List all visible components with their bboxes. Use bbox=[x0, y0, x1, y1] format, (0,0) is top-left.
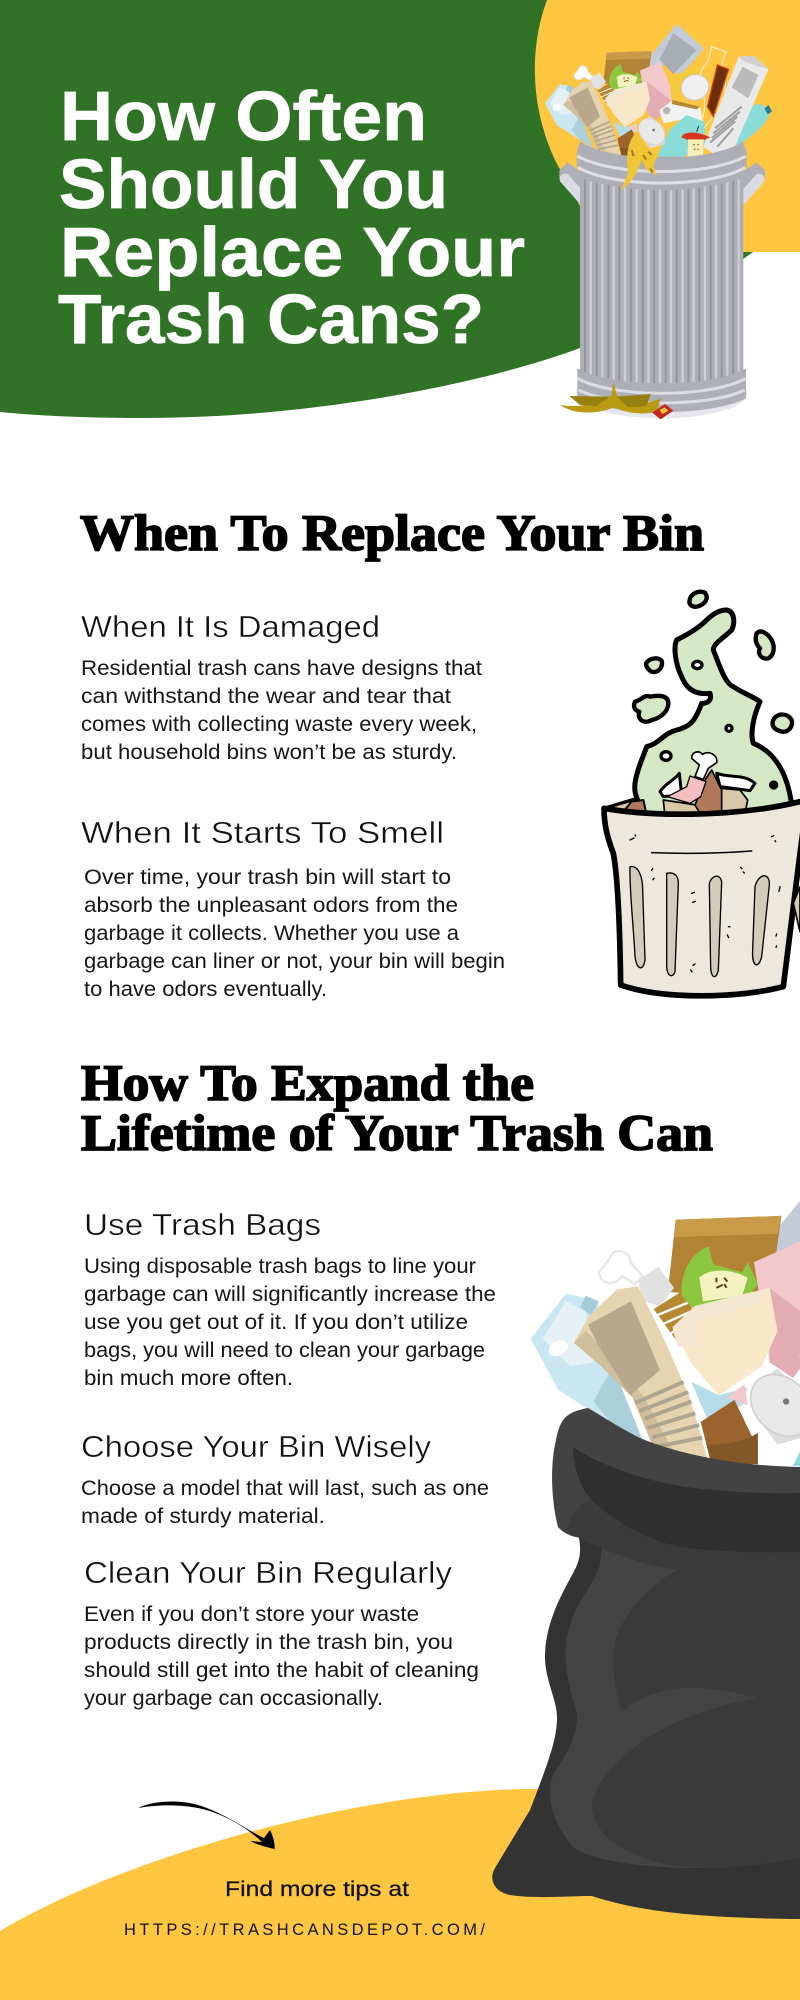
left handle bbox=[559, 162, 596, 217]
pink carton bbox=[640, 62, 672, 120]
bag neck lower band bbox=[566, 1500, 800, 1570]
section: when it starts to smell: garbage can liner or not, your bin will begin bbox=[84, 950, 505, 973]
can body bbox=[580, 157, 743, 391]
wrapper bbox=[652, 404, 673, 419]
bag silhouette bbox=[492, 1538, 800, 1919]
header green background bbox=[0, 0, 762, 418]
fluting dark bbox=[585, 180, 733, 385]
section: clean your bin regularly: should still get into the habit of cleaning bbox=[84, 1659, 479, 1682]
banana peel at base bbox=[560, 382, 661, 413]
title: Trash Cans? bbox=[58, 280, 484, 358]
section: clean your bin regularly: your garbage can occasionally. bbox=[84, 1687, 383, 1710]
section: use trash bags: bin much more often. bbox=[84, 1367, 293, 1390]
fluting light bbox=[591, 179, 739, 385]
section: clean your bin regularly: Even if you don’t store your waste bbox=[84, 1603, 419, 1626]
section: when it starts to smell bbox=[81, 815, 505, 1001]
section: when it is damaged: can withstand the wear and tear that bbox=[81, 685, 451, 708]
mesh bbox=[597, 83, 615, 106]
milk carton bbox=[545, 84, 593, 148]
can bottom band bbox=[577, 368, 746, 412]
section: when it is damaged bbox=[81, 609, 482, 764]
section: clean your bin regularly: Clean Your Bin Regularly bbox=[84, 1555, 453, 1590]
section: choose your bin wisely: made of sturdy material. bbox=[81, 1505, 325, 1528]
section: when it is damaged: but household bins won’t be as sturdy. bbox=[81, 741, 457, 764]
can shadow bbox=[576, 368, 747, 418]
food in bin bbox=[623, 800, 647, 815]
section: choose your bin wisely bbox=[81, 1429, 489, 1528]
section: when it is damaged: comes with collecting waste every week, bbox=[81, 713, 477, 736]
paper bag bbox=[603, 51, 652, 87]
heading: when to replace: When To Replace Your Bin bbox=[80, 506, 704, 562]
title: Should You bbox=[59, 145, 448, 223]
bin body bbox=[604, 802, 800, 996]
arrow bbox=[138, 1802, 275, 1849]
teal bottle bbox=[732, 103, 769, 148]
heading: how to expand: How To Expand the bbox=[81, 1056, 534, 1112]
section: when it starts to smell: When It Starts To Smell bbox=[81, 815, 444, 850]
tin lid bbox=[678, 71, 712, 104]
title bbox=[58, 77, 525, 358]
bag highlight layer bbox=[550, 1548, 800, 1868]
tin can bbox=[639, 116, 665, 148]
section: clean your bin regularly: products directly in the trash bin, you bbox=[84, 1631, 453, 1654]
footer call to action bbox=[124, 1878, 485, 1939]
section: when it starts to smell: garbage it collects. Whether you use a bbox=[84, 922, 459, 945]
cloud holes bbox=[661, 661, 732, 760]
footer call to action: HTTPS://TRASHCANSDEPOT.COM/ bbox=[124, 1921, 485, 1939]
section: use trash bags: bags, you will need to clean your garbage bbox=[84, 1339, 485, 1362]
section: when it is damaged: When It Is Damaged bbox=[81, 609, 380, 644]
illustration: black garbage bag bbox=[492, 1408, 800, 1919]
section: clean your bin regularly bbox=[84, 1555, 479, 1710]
bag neck dark band bbox=[573, 1447, 800, 1552]
bin line and specks bbox=[652, 851, 752, 853]
section: use trash bags: use you get out of it. If you don’t utilize bbox=[84, 1311, 468, 1334]
bin slots bbox=[630, 867, 769, 977]
back rim of bin bbox=[604, 796, 647, 815]
illustration: smelly bin bbox=[604, 592, 800, 996]
yellow crumple bbox=[670, 59, 697, 98]
gaps in cloud bbox=[660, 773, 682, 797]
section: choose your bin wisely: Choose Your Bin Wisely bbox=[81, 1429, 432, 1464]
footer call to action: Find more tips at bbox=[225, 1878, 409, 1901]
stench cloud bbox=[635, 610, 792, 815]
pink tip bbox=[628, 123, 637, 132]
illustration: metal trash can bbox=[559, 132, 765, 419]
tan newspaper bbox=[563, 81, 621, 156]
section: use trash bags: Use Trash Bags bbox=[84, 1207, 321, 1242]
section: when it is damaged: Residential trash cans have designs that bbox=[81, 657, 482, 680]
white can bbox=[659, 100, 703, 124]
fish head bbox=[591, 73, 606, 89]
brown box bbox=[617, 129, 642, 157]
illustration: pile of trash above the metal can bbox=[545, 24, 772, 158]
bottle outline bbox=[700, 47, 726, 129]
right handle piece bbox=[793, 887, 800, 932]
light-blue behind bbox=[613, 122, 637, 137]
bag neck bbox=[552, 1408, 800, 1570]
heading: how to expand: Lifetime of Your Trash Can bbox=[81, 1106, 713, 1162]
right handle bbox=[728, 162, 765, 217]
apple core green bbox=[609, 64, 642, 90]
apple core red bbox=[681, 133, 710, 156]
section: use trash bags: garbage can will significantly increase the bbox=[84, 1283, 496, 1306]
stench bubbles bbox=[634, 592, 792, 732]
section: use trash bags bbox=[84, 1207, 496, 1390]
section: when it starts to smell: to have odors eventually. bbox=[84, 978, 327, 1001]
bag inner fold bbox=[592, 1555, 800, 1868]
bone bbox=[574, 66, 593, 80]
grey newspaper right bbox=[703, 56, 769, 156]
section: use trash bags: Using disposable trash bags to line your bbox=[84, 1255, 476, 1278]
grey newspaper back bbox=[640, 24, 704, 77]
chocolate bar bbox=[707, 65, 729, 117]
header yellow shape bbox=[535, 0, 800, 252]
illustration: garbage overflowing from bag bbox=[531, 1152, 800, 1468]
can top rim bbox=[577, 142, 747, 188]
section: choose your bin wisely: Choose a model that will last, such as one bbox=[81, 1477, 489, 1500]
title: Replace Your bbox=[60, 213, 525, 291]
section: when it starts to smell: absorb the unpleasant odors from the bbox=[84, 894, 458, 917]
banana on the rim bbox=[621, 132, 660, 190]
section: when it starts to smell: Over time, your trash bin will start to bbox=[84, 866, 451, 889]
footer yellow wave bbox=[0, 1789, 800, 2000]
crumpled paper bbox=[605, 82, 650, 127]
teal blob bbox=[657, 115, 706, 158]
title: How Often bbox=[60, 77, 427, 155]
heading: how to expand bbox=[81, 1056, 713, 1162]
